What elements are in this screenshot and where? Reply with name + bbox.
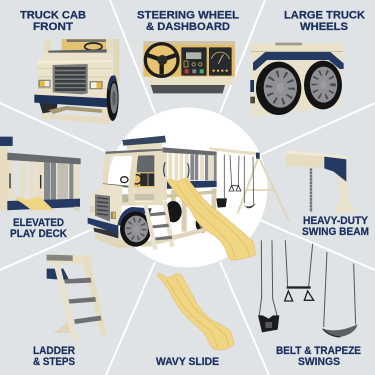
central image: truck playset bbox=[88, 136, 289, 260]
deck railing bbox=[162, 147, 217, 200]
gauge panel left bbox=[181, 47, 207, 76]
swing frame bbox=[209, 147, 289, 221]
gauge panel right bbox=[209, 47, 232, 76]
heading: elevated play deck: PLAY DECK bbox=[10, 228, 67, 240]
rear frame and wheels bbox=[140, 188, 217, 247]
image: play deck bbox=[0, 137, 81, 210]
heading: large truck wheels: LARGE TRUCK bbox=[284, 10, 365, 22]
panel: wavy slide bbox=[156, 274, 234, 368]
heading: ladder and steps bbox=[33, 345, 75, 368]
heading: truck cab front: FRONT bbox=[33, 21, 73, 33]
heading: heavy-duty swing beam bbox=[302, 215, 369, 238]
heading: steering wheel and dashboard: STEERING WHEEL bbox=[137, 10, 239, 22]
heading: ladder and steps: LADDER bbox=[33, 345, 75, 357]
truck front wheel bbox=[120, 211, 151, 247]
heading: ladder and steps: & STEPS bbox=[33, 356, 75, 368]
image: dashboard bbox=[143, 41, 235, 93]
panel: heavy-duty swing beam bbox=[286, 150, 369, 238]
heading: belt and trapeze swings bbox=[276, 345, 361, 368]
heading: heavy-duty swing beam: HEAVY-DUTY bbox=[303, 215, 369, 227]
image: truck wheels bbox=[250, 43, 344, 117]
heading: truck cab front: TRUCK CAB bbox=[20, 10, 86, 22]
image: truck cab front bbox=[34, 39, 119, 124]
image: swing beam bbox=[286, 150, 356, 212]
panel: truck cab front bbox=[20, 10, 119, 124]
panel: elevated play deck bbox=[0, 137, 81, 240]
panel: belt and trapeze swings bbox=[258, 240, 361, 368]
heading: belt and trapeze swings: BELT & TRAPEZE bbox=[276, 345, 361, 357]
icon: steering wheel bbox=[145, 44, 178, 76]
panel: large truck wheels bbox=[250, 10, 365, 117]
heading: truck cab front bbox=[20, 10, 86, 33]
truck hood and grille bbox=[88, 184, 152, 248]
panel: ladder and steps bbox=[33, 255, 107, 368]
heading: belt and trapeze swings: SWINGS bbox=[298, 356, 340, 368]
heading: elevated play deck: ELEVATED bbox=[13, 217, 64, 229]
heading: wavy slide: WAVY SLIDE bbox=[156, 356, 219, 368]
yellow slide bbox=[167, 177, 256, 260]
image: swings bbox=[258, 240, 358, 337]
heading: steering wheel and dashboard bbox=[137, 10, 239, 33]
center white circle bbox=[108, 108, 268, 268]
ladder bbox=[143, 200, 174, 250]
heading: heavy-duty swing beam: SWING BEAM bbox=[302, 226, 369, 238]
heading: steering wheel and dashboard: & DASHBOARD bbox=[146, 21, 230, 33]
heading: large truck wheels: WHEELS bbox=[300, 21, 348, 33]
image: ladder bbox=[47, 255, 107, 342]
panel: steering wheel and dashboard bbox=[137, 10, 239, 93]
image: wavy slide bbox=[157, 274, 234, 350]
cab bbox=[102, 136, 166, 206]
heading: elevated play deck bbox=[10, 217, 67, 240]
heading: large truck wheels bbox=[284, 10, 365, 33]
